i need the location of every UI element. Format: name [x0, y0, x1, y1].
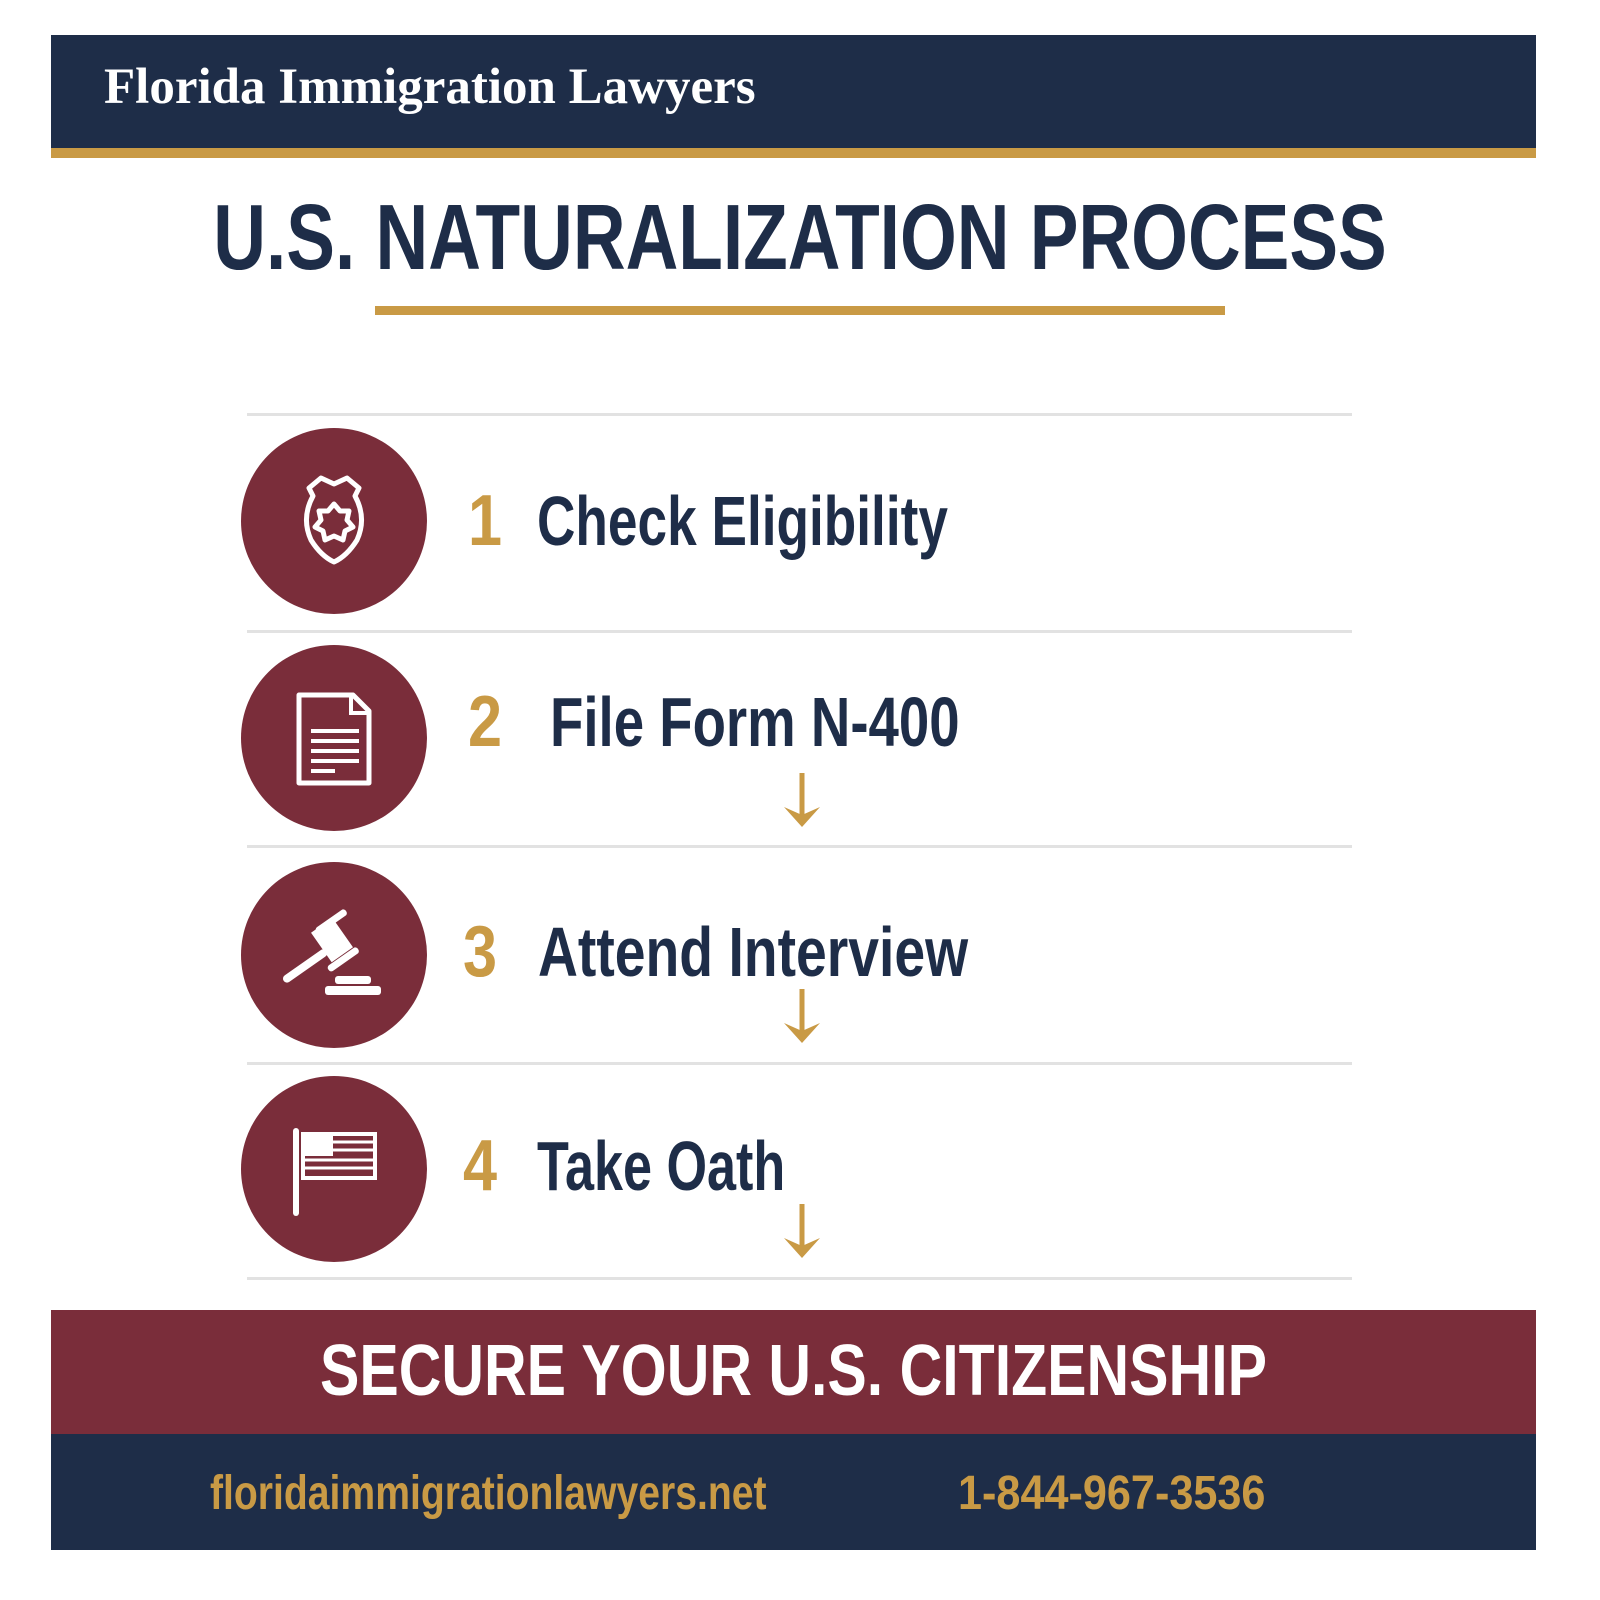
number 3: 3	[463, 912, 497, 992]
arrow 3	[784, 1204, 820, 1258]
step 1	[241, 428, 948, 614]
icon: document	[241, 645, 427, 831]
step 2	[241, 645, 960, 831]
banner text: SECURE YOUR U.S. CITIZENSHIP	[320, 1331, 1267, 1411]
number 2: 2	[468, 682, 502, 762]
label: Attend Interview	[538, 913, 968, 991]
icon: gavel	[241, 862, 427, 1048]
header bar	[51, 35, 1536, 158]
header text: Florida Immigration Lawyers	[104, 59, 756, 115]
number 1: 1	[468, 481, 502, 561]
step 4	[241, 1076, 785, 1262]
phone: 1-844-967-3536	[958, 1467, 1265, 1520]
step 3	[241, 862, 968, 1048]
arrow 2	[784, 989, 820, 1043]
icon: flag	[241, 1076, 427, 1262]
title: U.S. NATURALIZATION PROCESS	[213, 185, 1387, 289]
banner	[51, 1310, 1536, 1434]
title underline	[375, 306, 1225, 315]
label: File Form N-400	[550, 683, 960, 761]
footer	[51, 1434, 1536, 1550]
arrow 1	[784, 773, 820, 827]
website: floridaimmigrationlawyers.net	[210, 1467, 767, 1520]
label: Take Oath	[537, 1127, 785, 1205]
icon: badge	[241, 428, 427, 614]
number 4: 4	[463, 1126, 497, 1206]
label: Check Eligibility	[537, 482, 948, 560]
